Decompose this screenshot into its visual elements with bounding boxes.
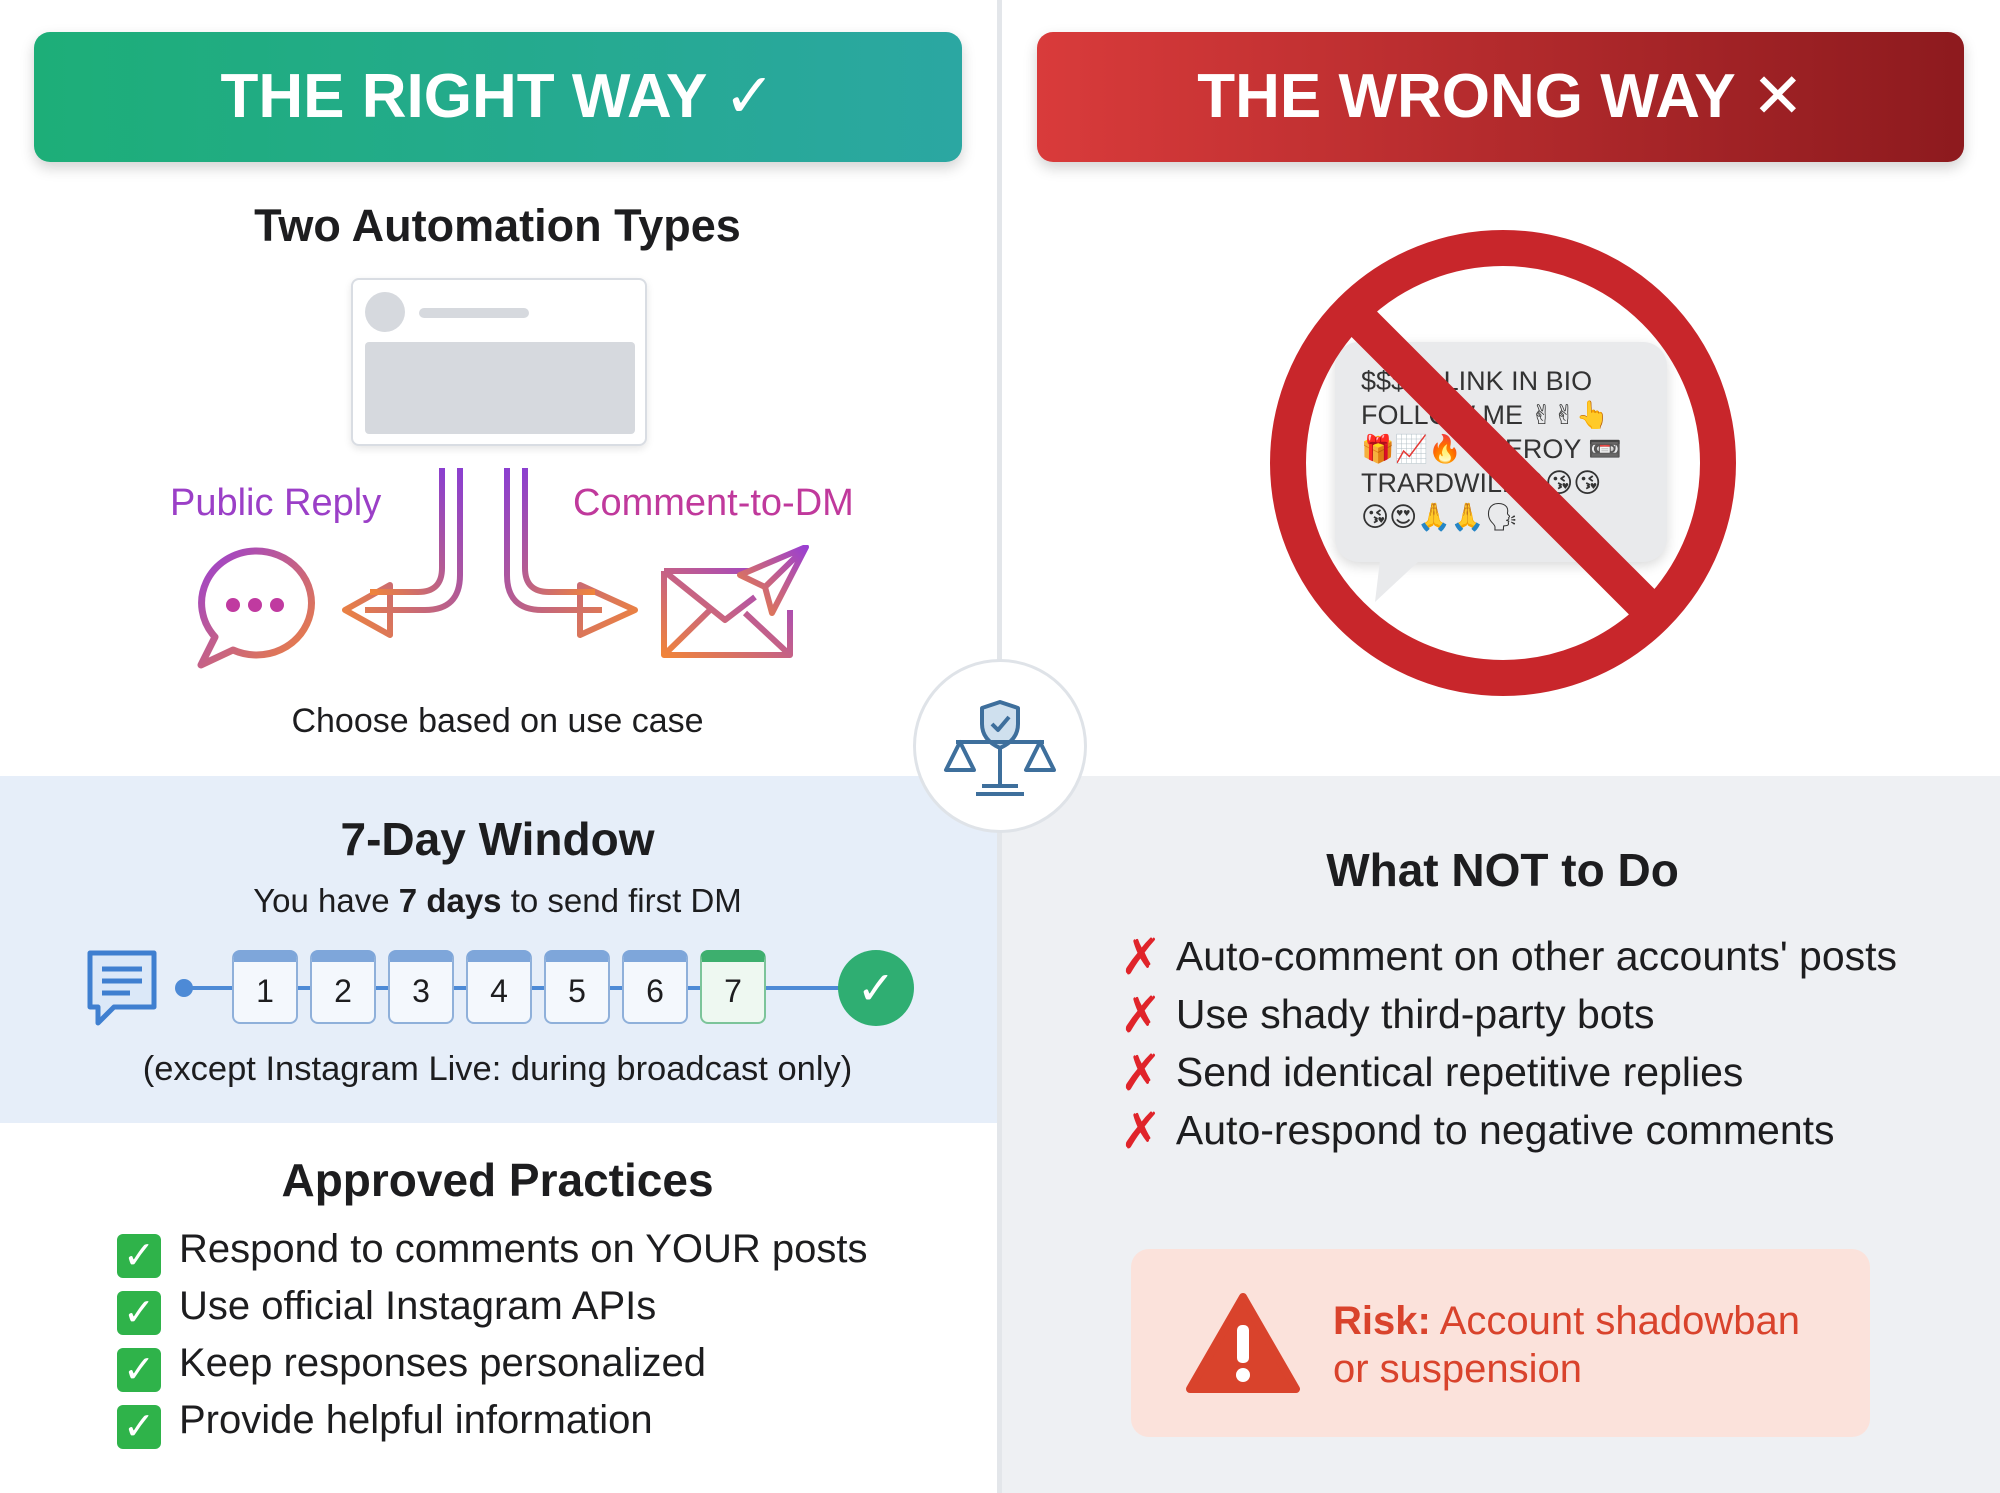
callout: risk <box>1131 1249 1870 1437</box>
icon: post card <box>351 278 647 446</box>
spam bubble: 😘😍🙏🙏🗣 <box>1361 502 1519 532</box>
list: what not to do <box>1120 929 1897 1159</box>
timeline: 4 <box>490 973 508 1009</box>
list: approved practices: Use official Instagram APIs <box>179 1284 656 1328</box>
heading: 7-day window: 7-Day Window <box>341 813 654 865</box>
timeline: 1 <box>256 973 274 1009</box>
list: approved practices: ✓ <box>123 1349 155 1391</box>
prohibition graphic <box>1270 230 1736 696</box>
text: you have 7 days: You have 7 days to send first DM <box>253 882 742 919</box>
background: left 7-day band <box>0 776 998 1123</box>
background: right lower gray <box>1002 776 2000 1493</box>
icon: green check: ✓ <box>857 962 895 1014</box>
list: approved practices <box>117 1227 867 1449</box>
list: what not to do: ✗ Use shady third-party bots <box>1120 987 1654 1043</box>
list: approved practices: ✓ <box>123 1406 155 1448</box>
label: comment-to-DM: Comment-to-DM <box>573 482 854 524</box>
timeline: 5 <box>568 973 586 1009</box>
note: instagram live exception: (except Instagram Live: during broadcast only) <box>143 1050 852 1088</box>
caption: choose based on use case: Choose based on use case <box>291 702 704 740</box>
header: the right way: THE RIGHT WAY ✓ <box>221 62 775 131</box>
list: approved practices: Respond to comments on YOUR posts <box>179 1227 867 1271</box>
heading: two automation types: Two Automation Types <box>254 200 741 251</box>
list: what not to do: ✗ Auto-respond to negative comments <box>1120 1103 1835 1159</box>
arrows: split flow <box>342 468 638 638</box>
header: the wrong way <box>1037 32 1964 162</box>
list: approved practices: ✓ <box>123 1292 155 1334</box>
list: approved practices: ✓ <box>123 1235 155 1277</box>
timeline: 3 <box>412 973 430 1009</box>
header: the right way <box>34 32 962 162</box>
heading: approved practices: Approved Practices <box>281 1154 714 1206</box>
list: approved practices: Provide helpful information <box>179 1398 653 1442</box>
text: risk <box>1333 1299 1800 1391</box>
list: approved practices: Keep responses personalized <box>179 1341 706 1385</box>
icon: green check <box>838 950 914 1026</box>
spam bubble: FOLLOW ME ✌✌👆 <box>1361 400 1609 430</box>
timeline: 7 <box>724 973 742 1009</box>
icon: envelope with paper plane <box>661 545 809 658</box>
label: public reply: Public Reply <box>170 482 381 524</box>
text: risk: Risk: Account shadowban <box>1333 1299 1800 1343</box>
spam bubble: TRARDWILL😘😘😘 <box>1361 468 1601 498</box>
timeline: 2 <box>334 973 352 1009</box>
list: what not to do: ✗ Auto-comment on other accounts' posts <box>1120 929 1897 985</box>
spam bubble <box>1335 342 1667 562</box>
header: the wrong way: THE WRONG WAY ✕ <box>1197 62 1804 131</box>
icon: message <box>88 950 156 1026</box>
spam bubble: $$$$$ LINK IN BIO <box>1361 366 1592 396</box>
spam bubble: 🎁📈🔥 TREROY 📼 <box>1361 434 1622 464</box>
icon: warning <box>1186 1293 1300 1393</box>
text: risk: or suspension <box>1333 1347 1582 1391</box>
list: what not to do: ✗ Send identical repetitive replies <box>1120 1045 1743 1101</box>
heading: what not to do: What NOT to Do <box>1326 844 1679 896</box>
timeline <box>88 950 914 1026</box>
icon: balance scale <box>913 659 1087 833</box>
icon: chat bubble <box>198 548 315 668</box>
timeline: 6 <box>646 973 664 1009</box>
